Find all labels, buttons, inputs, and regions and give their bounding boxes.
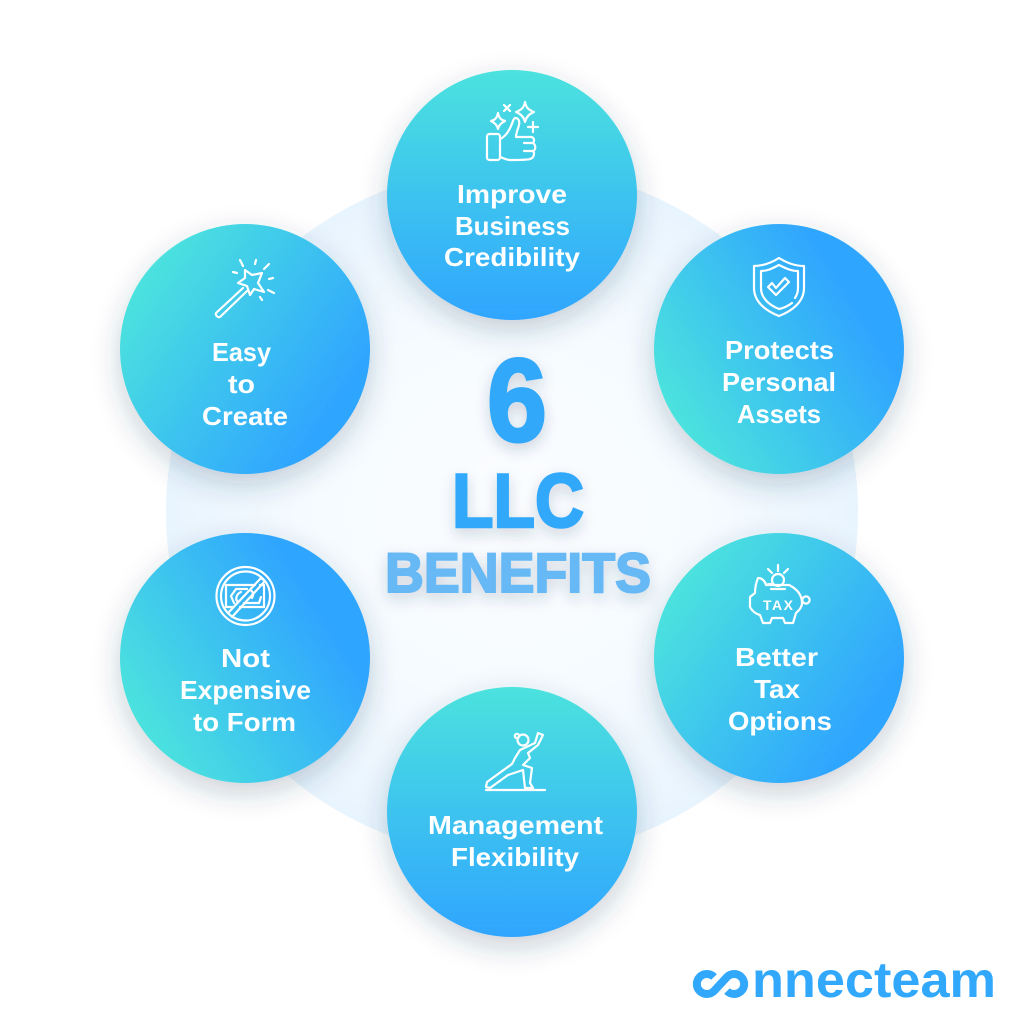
circle [387,70,637,320]
panel: management flexibility [387,687,637,937]
label: Expensive [180,675,311,705]
label: Easy [212,337,272,367]
label [202,337,288,431]
label [428,810,603,872]
title LLC: LLC [452,459,584,544]
circle [120,533,370,783]
icon: thumbs up with sparkles [487,102,538,160]
label [180,643,311,737]
title number 6: 6 [487,335,547,467]
label: Options [728,706,832,736]
label: Better [735,642,818,672]
title [385,335,651,604]
label: Assets [737,399,821,429]
label: Personal [722,367,836,397]
logo wordmark: nnecteam [752,952,996,1008]
label: Business [455,211,570,241]
logo: connecteam [697,952,996,1008]
panel: protects personal assets [654,224,904,474]
background disc [166,166,858,858]
label: Flexibility [451,842,580,872]
icon: magic wand [216,260,274,317]
label: to Form [193,707,296,737]
circle [654,224,904,474]
icon: shield with check [754,258,804,316]
panel: not expensive to form [120,533,370,783]
circle [654,533,904,783]
label: Protects [725,335,834,365]
icon: crossed-out money [216,567,274,625]
icon: piggy bank with coin [750,565,810,623]
circle [387,687,637,937]
icon text: TAX: TAX [763,597,794,613]
circle [120,224,370,474]
label [444,179,581,272]
label [722,335,836,429]
label [728,642,832,736]
icon: yoga figure [486,733,545,790]
label: to [228,369,255,399]
panel: improve business credibility [387,70,637,320]
title BENEFITS: BENEFITS [385,541,651,604]
label: Create [202,401,288,431]
panel: better tax options [654,533,904,783]
label: Credibility [444,242,581,272]
label: Not [221,643,270,673]
panel: easy to create [120,224,370,474]
logo mark [697,974,744,994]
label: Improve [457,179,567,209]
label: Tax [754,674,801,704]
label: Management [428,810,603,840]
